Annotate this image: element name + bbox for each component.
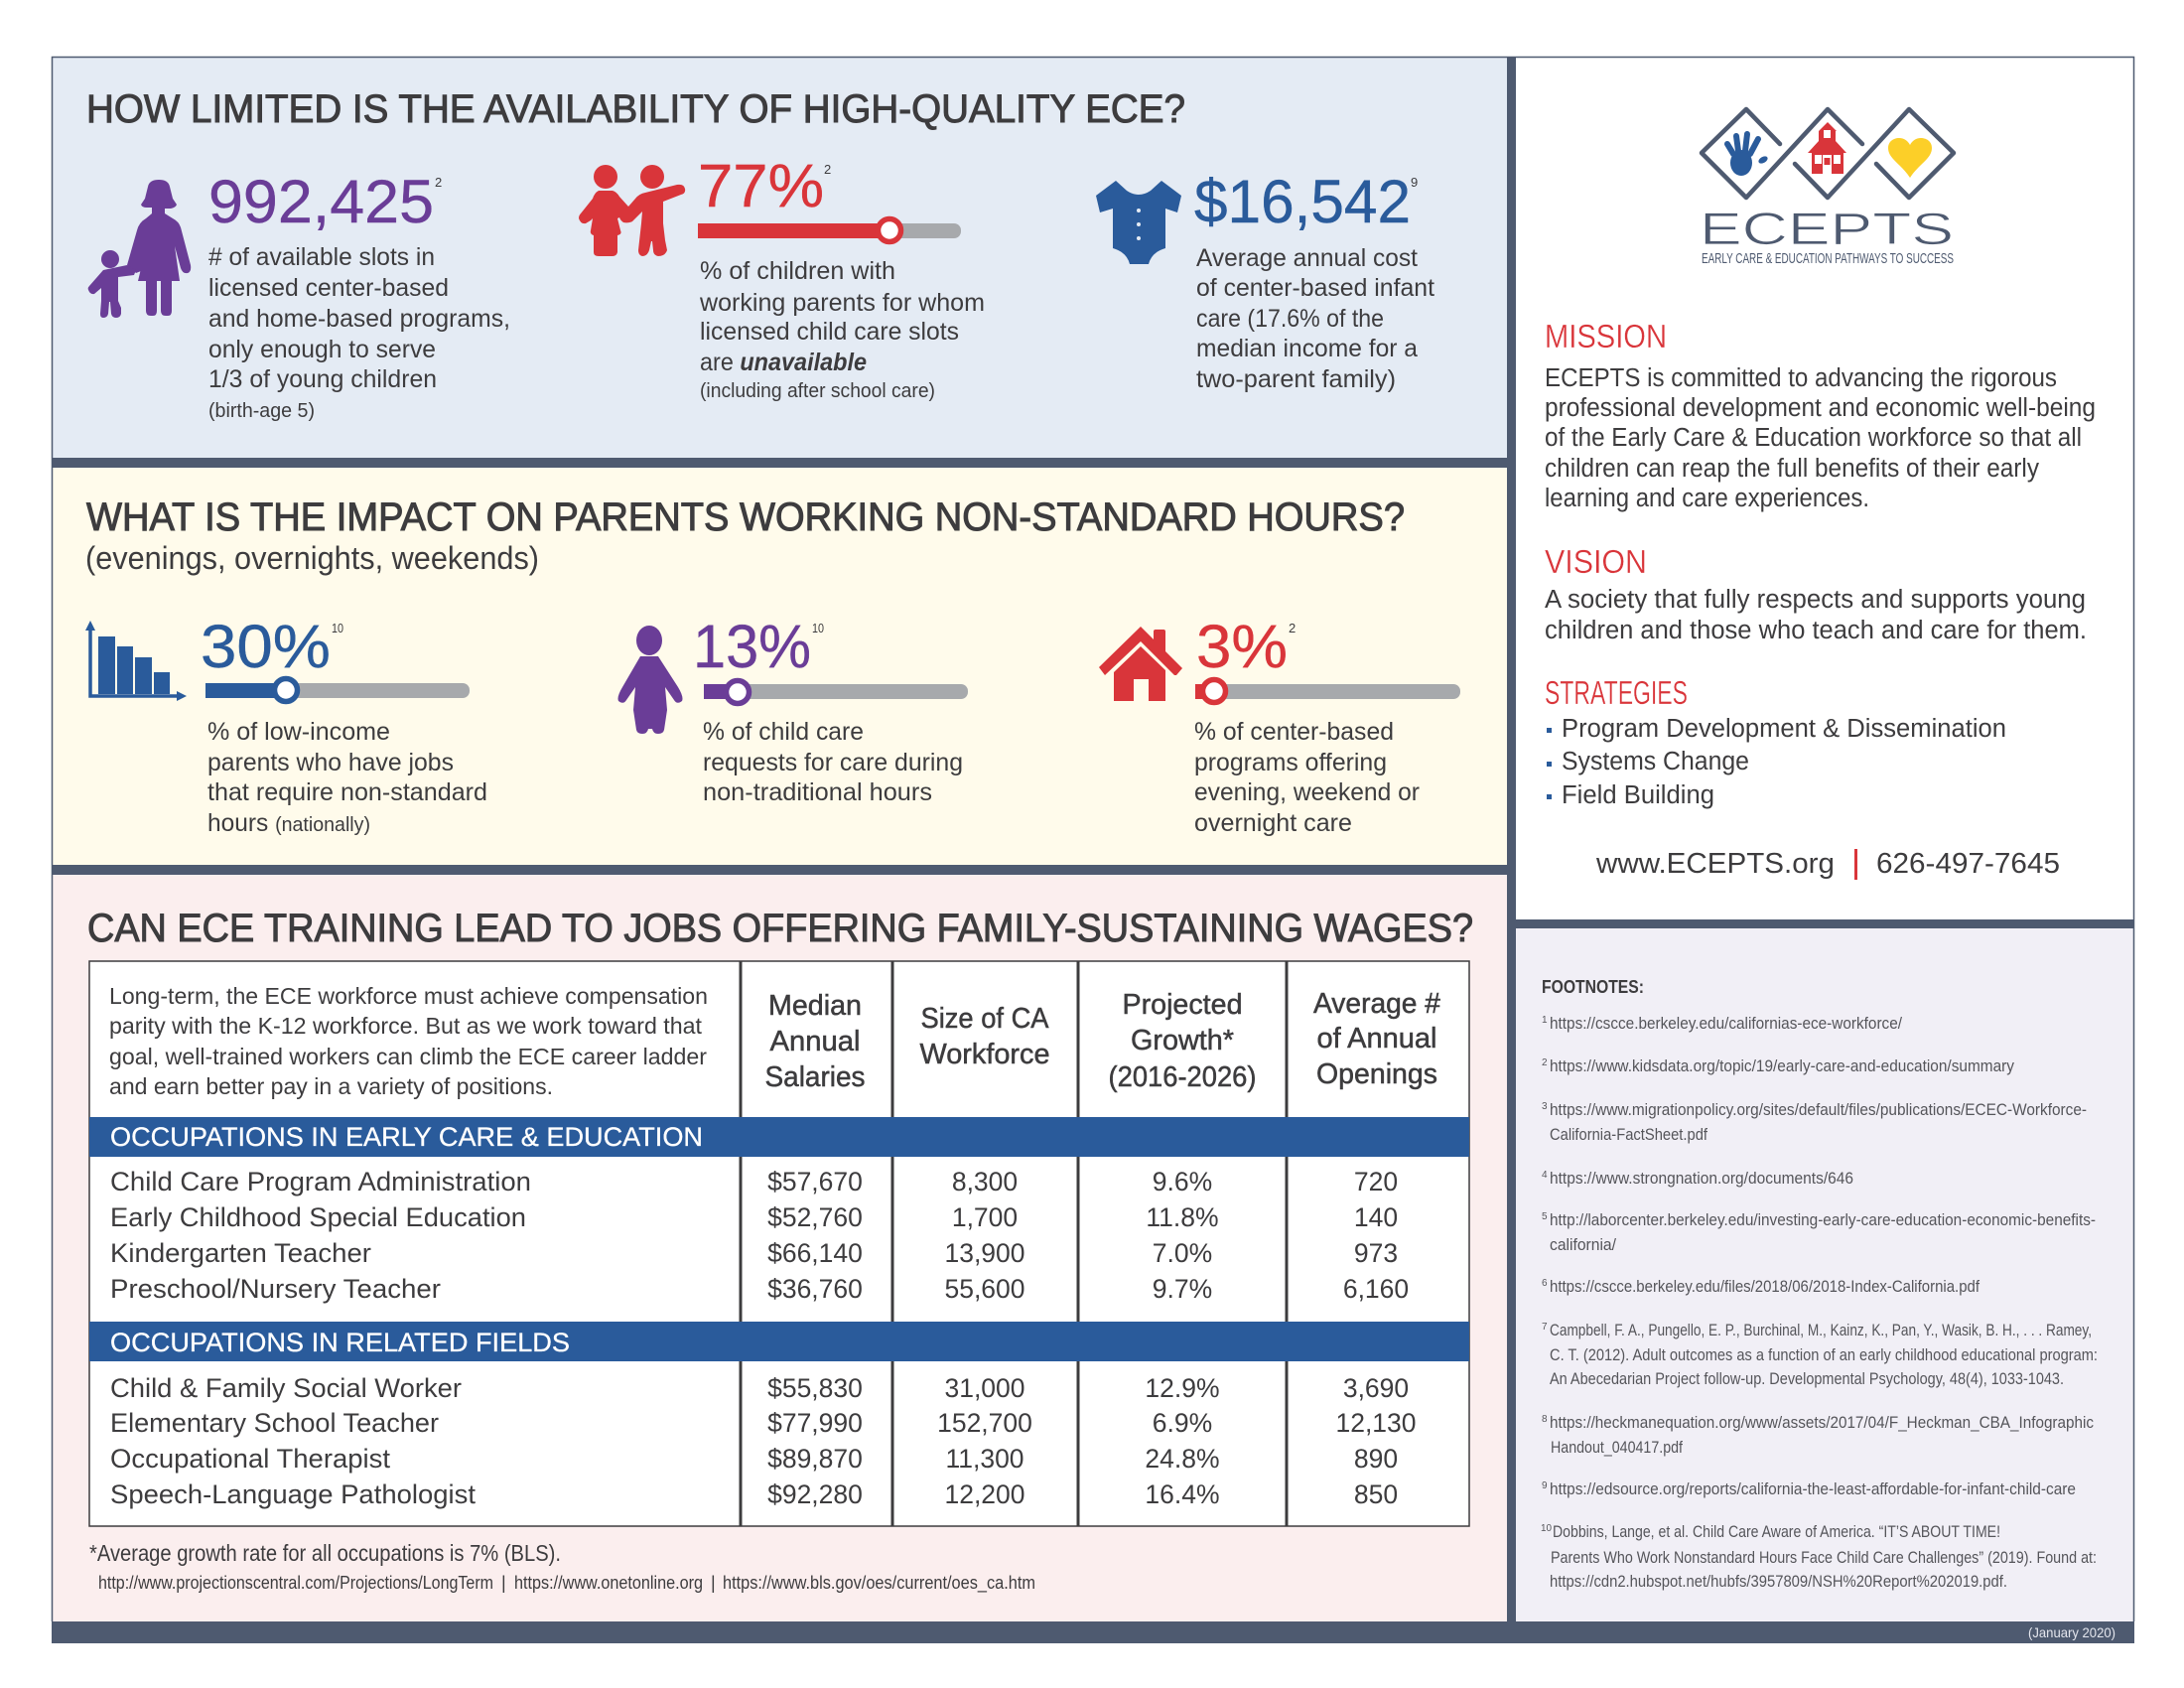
- icon: parents and child: [579, 165, 685, 256]
- column header: growth: (2016-2026): [1108, 1061, 1257, 1093]
- footnote mark: 2: [1289, 621, 1296, 635]
- table intro text: parity with the K-12 workforce. But as we work toward that: [109, 1013, 702, 1039]
- column header: workforce: Workforce: [919, 1039, 1050, 1070]
- text: annual cost: median income for a: [1196, 335, 1418, 362]
- divider bar: [1516, 919, 2134, 928]
- footnote 4: https://www.strongnation.org/documents/646: [1550, 1169, 1853, 1188]
- icon: onesie: [1096, 181, 1181, 264]
- contact line: www.ECEPTS.org: [1595, 848, 1835, 880]
- vertical divider: [1507, 57, 1516, 1643]
- rows: early care occupations: 8,300: [952, 1167, 1018, 1196]
- footnote 5: http://laborcenter.berkeley.edu/investing-early-care-education-economic-benefits-: [1550, 1210, 2096, 1229]
- icon: house: [1099, 627, 1182, 701]
- rows: related occupations: [110, 1373, 1417, 1509]
- table intro text: goal, well-trained workers can climb the ECE career ladder: [109, 1044, 707, 1069]
- column header: growth: [1108, 989, 1257, 1093]
- column header: openings: of Annual: [1316, 1023, 1437, 1055]
- footnote 8: [1542, 1413, 2094, 1457]
- footnote 5: california/: [1550, 1235, 1616, 1254]
- list: strategies: Systems Change: [1562, 748, 1749, 775]
- date: (January 2020): [2028, 1624, 2116, 1640]
- footnote 2: 2: [1542, 1057, 1548, 1068]
- stat: 77%: 77%: [698, 152, 824, 219]
- band: related occupations: OCCUPATIONS IN RELATED FIELDS: [110, 1328, 570, 1357]
- rows: related occupations: 11,300: [945, 1444, 1024, 1474]
- column header: openings: Average #: [1313, 988, 1440, 1020]
- icon: bar chart: [85, 621, 187, 701]
- rows: early care occupations: 140: [1354, 1202, 1398, 1232]
- rows: early care occupations: 973: [1354, 1238, 1398, 1268]
- logo diamonds: [1702, 109, 1954, 198]
- footnote 10: Parents Who Work Nonstandard Hours Face Child Care Challenges” (2019). Found at:: [1551, 1548, 2097, 1567]
- footnote 8: Handout_040417.pdf: [1551, 1438, 1683, 1457]
- panel: about ECEPTS: [1516, 57, 2134, 919]
- text: center-based programs: programs offering: [1194, 749, 1387, 776]
- text: mission: learning and care experiences.: [1545, 485, 1869, 512]
- divider bar: [52, 865, 1516, 875]
- rows: early care occupations: $52,760: [767, 1202, 863, 1232]
- text: low-income parents: parents who have jobs: [207, 749, 454, 776]
- contact line: [1595, 848, 2060, 880]
- heading: availability: HOW LIMITED IS THE AVAILABILITY OF HIGH-QUALITY ECE?: [86, 87, 1185, 131]
- stat: 13%: 13%: [693, 613, 811, 680]
- column header: workforce: [919, 1003, 1050, 1070]
- footnote 3: California-FactSheet.pdf: [1550, 1125, 1707, 1144]
- footnote mark: 9: [1411, 175, 1418, 190]
- rows: related occupations: 152,700: [937, 1408, 1032, 1438]
- footnote 10: [1541, 1522, 2097, 1591]
- list: strategies: Field Building: [1562, 781, 1714, 809]
- icon: child: [617, 626, 683, 734]
- column header: salaries: Salaries: [764, 1061, 866, 1093]
- table sources: |: [711, 1573, 716, 1593]
- table note: *Average growth rate for all occupations is 7% (BLS).: [89, 1540, 561, 1566]
- panel: non-standard hours: [52, 468, 1507, 865]
- text: low-income parents: [207, 718, 487, 837]
- text: available slots: [208, 243, 510, 422]
- stat: $16,542: $16,542: [1194, 168, 1411, 235]
- rows: related occupations: 31,000: [944, 1373, 1025, 1403]
- text: mission: professional development and economic well-being: [1545, 394, 2096, 422]
- text: child care requests: non-traditional hours: [703, 778, 932, 806]
- footer bar: [52, 1621, 2134, 1643]
- footnote 9: 9: [1542, 1480, 1548, 1491]
- rows: early care occupations: 13,900: [944, 1238, 1025, 1268]
- footnote 9: https://edsource.org/reports/california-the-least-affordable-for-infant-child-care: [1550, 1479, 2076, 1498]
- heading: mission: MISSION: [1545, 318, 1667, 354]
- text: low-income parents: hours (nationally): [207, 809, 370, 837]
- table: [89, 961, 1469, 1526]
- column header: openings: Openings: [1316, 1058, 1437, 1090]
- text: available slots: 1/3 of young children: [208, 365, 437, 393]
- footnote 7: [1542, 1321, 2098, 1388]
- table sources: https://www.onetonline.org: [514, 1573, 703, 1593]
- text: vision: A society that fully respects and supports young: [1545, 586, 2086, 614]
- footnote 2: https://www.kidsdata.org/topic/19/early-care-and-education/summary: [1550, 1056, 2014, 1075]
- rows: related occupations: Speech-Language Pathologist: [110, 1479, 476, 1509]
- footnote 10: https://cdn2.hubspot.net/hubfs/3957809/NSH%20Report%202019.pdf.: [1550, 1572, 2007, 1591]
- rows: early care occupations: Preschool/Nursery Teacher: [110, 1274, 441, 1304]
- rows: related occupations: Elementary School Teacher: [110, 1408, 439, 1438]
- stat: 30%: 30%: [201, 613, 331, 680]
- table sources: http://www.projectionscentral.com/Projections/LongTerm: [98, 1573, 493, 1593]
- footnote mark: 10: [332, 621, 343, 635]
- rows: early care occupations: 1,700: [952, 1202, 1018, 1232]
- heading: vision: VISION: [1545, 543, 1647, 580]
- text: children with working parents: [699, 257, 985, 402]
- text: annual cost: two-parent family): [1196, 365, 1396, 393]
- rows: early care occupations: 7.0%: [1153, 1238, 1212, 1268]
- rows: early care occupations: Kindergarten Teacher: [110, 1238, 371, 1268]
- contact line: 626-497-7645: [1876, 848, 2060, 880]
- text: children with working parents: % of children with: [700, 257, 895, 285]
- footnote 4: 4: [1542, 1170, 1548, 1181]
- footnote 8: 8: [1542, 1414, 1548, 1425]
- rows: related occupations: $55,830: [767, 1373, 863, 1403]
- rows: early care occupations: 11.8%: [1146, 1202, 1219, 1232]
- rows: early care occupations: Child Care Program Administration: [110, 1167, 531, 1196]
- text: mission: children can reap the full benefits of their early: [1545, 455, 2039, 483]
- panel: footnotes: [1516, 928, 2134, 1621]
- text: child care requests: % of child care: [703, 718, 864, 746]
- text: vision: children and those who teach and care for them.: [1545, 617, 2087, 644]
- text: available slots: licensed center-based: [208, 274, 449, 302]
- column header: growth: Growth*: [1131, 1025, 1234, 1056]
- panel: family-sustaining wages: [52, 875, 1507, 1621]
- stat: 992,425: 992,425: [208, 168, 434, 235]
- icon: schoolhouse: [1808, 122, 1846, 174]
- rows: related occupations: 3,690: [1343, 1373, 1409, 1403]
- text: mission: of the Early Care & Education workforce so that all: [1545, 424, 2082, 452]
- footnote 6: 6: [1542, 1278, 1548, 1289]
- text: low-income parents: % of low-income: [207, 718, 390, 746]
- rows: early care occupations: Early Childhood Special Education: [110, 1202, 526, 1232]
- progress bar: 77%: [698, 218, 961, 242]
- stat: 3%: 3%: [1196, 613, 1288, 680]
- rows: early care occupations: 720: [1354, 1167, 1398, 1196]
- column header: growth: Projected: [1122, 989, 1243, 1021]
- column header: openings: [1313, 988, 1440, 1090]
- band: early care occupations: [89, 1117, 1469, 1157]
- text: available slots: only enough to serve: [208, 336, 436, 363]
- heading: non-standard hours: WHAT IS THE IMPACT ON PARENTS WORKING NON-STANDARD HOURS?: [86, 495, 1405, 539]
- text: available slots: # of available slots in: [208, 243, 435, 271]
- text: children with working parents: working parents for whom: [699, 289, 985, 317]
- table intro text: and earn better pay in a variety of positions.: [109, 1073, 553, 1099]
- rows: early care occupations: $66,140: [767, 1238, 863, 1268]
- text: child care requests: [703, 718, 963, 806]
- subheading: (evenings, overnights, weekends): [85, 540, 539, 576]
- heading: footnotes: FOOTNOTES:: [1542, 977, 1644, 997]
- rows: related occupations: 12.9%: [1145, 1373, 1220, 1403]
- footnote 7: An Abecedarian Project follow-up. Developmental Psychology, 48(4), 1033-1043.: [1550, 1369, 2064, 1388]
- footnote 5: 5: [1542, 1211, 1548, 1222]
- text: center-based programs: % of center-based: [1194, 718, 1394, 746]
- logo: ECEPTS: [1700, 109, 1954, 267]
- footnote 7: C. T. (2012). Adult outcomes as a function of an early childhood educational program:: [1550, 1345, 2098, 1364]
- column header: salaries: Median: [768, 990, 862, 1022]
- footnote 8: https://heckmanequation.org/www/assets/2017/04/F_Heckman_CBA_Infographic: [1550, 1413, 2094, 1432]
- list: strategies: Program Development & Dissemination: [1562, 715, 2006, 743]
- rows: early care occupations: 9.7%: [1153, 1274, 1212, 1304]
- text: children with working parents: (including after school care): [700, 380, 935, 402]
- text: center-based programs: overnight care: [1194, 809, 1352, 837]
- text: low-income parents: that require non-standard: [207, 778, 487, 806]
- logo tagline: EARLY CARE & EDUCATION PATHWAYS TO SUCCESS: [1702, 250, 1954, 267]
- logo wordmark: ECEPTS: [1700, 204, 1954, 254]
- footnote 3: https://www.migrationpolicy.org/sites/default/files/publications/ECEC-Workforce-: [1550, 1100, 2087, 1119]
- table sources: https://www.bls.gov/oes/current/oes_ca.htm: [723, 1573, 1035, 1594]
- heading: strategies: STRATEGIES: [1545, 674, 1688, 711]
- table sources: |: [501, 1573, 506, 1593]
- icon: handprint: [1727, 134, 1769, 176]
- text: center-based programs: evening, weekend or: [1194, 778, 1420, 806]
- footnote 1: https://cscce.berkeley.edu/californias-ece-workforce/: [1550, 1014, 1902, 1033]
- text: children with working parents: licensed child care slots: [700, 318, 959, 346]
- rows: related occupations: 12,130: [1335, 1408, 1417, 1438]
- rows: related occupations: 890: [1354, 1444, 1398, 1474]
- footnote 3: 3: [1542, 1101, 1548, 1112]
- footnote 10: 10: [1541, 1523, 1552, 1534]
- panel: availability of high-quality ECE: [52, 57, 1507, 458]
- rows: related occupations: 12,200: [944, 1479, 1025, 1509]
- column header: salaries: [764, 990, 866, 1093]
- text: children with working parents: are unavailable: [700, 349, 867, 376]
- footnote mark: 2: [824, 162, 831, 177]
- table intro text: [109, 983, 708, 1099]
- text: available slots: and home-based programs,: [208, 305, 510, 333]
- footnote 10: Dobbins, Lange, et al. Child Care Aware of America. “IT’S ABOUT TIME!: [1553, 1522, 2000, 1541]
- footnote 6: https://cscce.berkeley.edu/files/2018/06/2018-Index-California.pdf: [1550, 1277, 1979, 1296]
- column header: workforce: Size of CA: [921, 1003, 1049, 1035]
- progress bar: 13%: [704, 681, 968, 703]
- footnote 3: [1542, 1100, 2087, 1144]
- rows: related occupations: 850: [1354, 1479, 1398, 1509]
- rows: related occupations: 24.8%: [1145, 1444, 1220, 1474]
- heading: wages: CAN ECE TRAINING LEAD TO JOBS OFFERING FAMILY-SUSTAINING WAGES?: [87, 907, 1473, 950]
- footnote mark: 10: [812, 621, 824, 635]
- rows: related occupations: $92,280: [767, 1479, 863, 1509]
- progress bar: 30%: [205, 679, 470, 701]
- icon: mother and child: [88, 180, 191, 318]
- divider bar: [52, 458, 1516, 468]
- rows: related occupations: 16.4%: [1145, 1479, 1220, 1509]
- rows: related occupations: Occupational Therapist: [110, 1444, 390, 1474]
- rows: early care occupations: [110, 1167, 1409, 1304]
- text: child care requests: requests for care during: [703, 749, 963, 776]
- text: mission: ECEPTS is committed to advancing the rigorous: [1545, 364, 2057, 392]
- band: related occupations: [89, 1322, 1469, 1361]
- text: annual cost: Average annual cost: [1196, 244, 1418, 272]
- rows: related occupations: $89,870: [767, 1444, 863, 1474]
- band: early care occupations: OCCUPATIONS IN EARLY CARE & EDUCATION: [110, 1122, 703, 1152]
- footnote 5: [1542, 1210, 2096, 1254]
- rows: related occupations: 6.9%: [1153, 1408, 1212, 1438]
- rows: related occupations: $77,990: [767, 1408, 863, 1438]
- footnote mark: 2: [435, 175, 442, 190]
- text: vision: [1545, 586, 2087, 644]
- table sources: [98, 1573, 1035, 1594]
- rows: early care occupations: $57,670: [767, 1167, 863, 1196]
- list: strategies: [1547, 715, 2006, 809]
- icon: heart: [1888, 138, 1932, 178]
- rows: early care occupations: 9.6%: [1153, 1167, 1212, 1196]
- table intro text: Long-term, the ECE workforce must achieve compensation: [109, 983, 708, 1009]
- text: center-based programs: [1194, 718, 1420, 837]
- footnote 1: 1: [1542, 1015, 1548, 1026]
- rows: early care occupations: 55,600: [944, 1274, 1025, 1304]
- column header: salaries: Annual: [770, 1026, 860, 1057]
- text: available slots: (birth-age 5): [208, 400, 315, 422]
- rows: related occupations: Child & Family Social Worker: [110, 1373, 462, 1403]
- footnote 7: 7: [1542, 1322, 1548, 1333]
- text: annual cost: [1196, 244, 1434, 393]
- rows: early care occupations: $36,760: [767, 1274, 863, 1304]
- text: annual cost: of center-based infant: [1196, 274, 1434, 302]
- rows: early care occupations: 6,160: [1343, 1274, 1409, 1304]
- text: mission: [1545, 364, 2096, 512]
- progress bar: 3%: [1195, 679, 1460, 703]
- text: annual cost: care (17.6% of the: [1196, 305, 1384, 333]
